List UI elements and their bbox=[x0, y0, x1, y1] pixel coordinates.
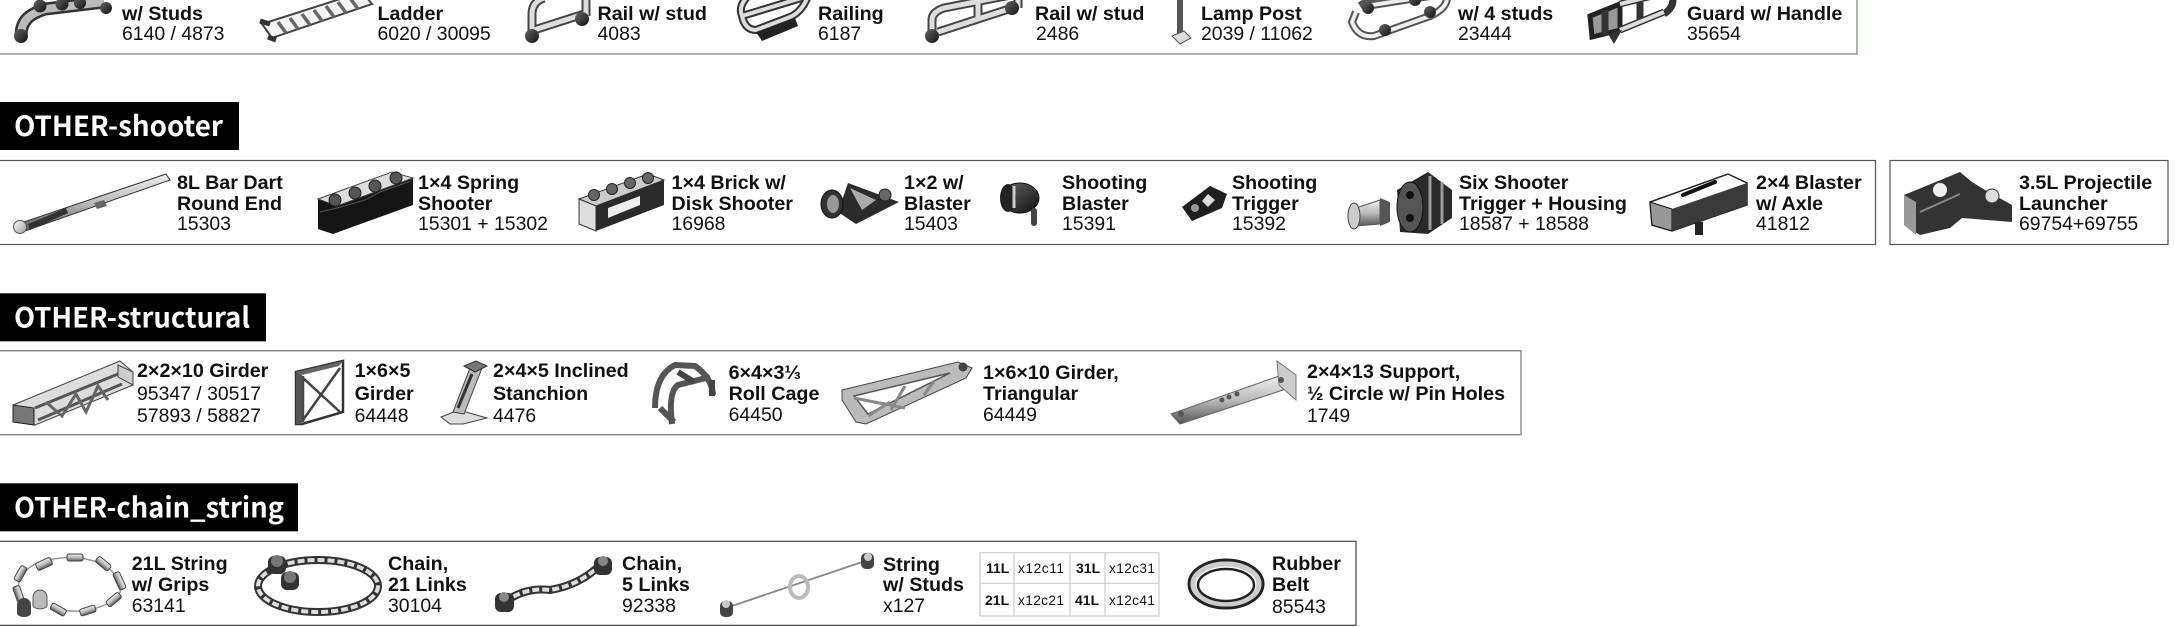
icon: girder bbox=[13, 361, 133, 425]
part: 2x2x10 girder bbox=[13, 360, 269, 427]
label: Railing bbox=[818, 3, 884, 25]
table: string lengths: x12c21 bbox=[1018, 593, 1064, 608]
label: w/ Axle bbox=[1755, 193, 1823, 215]
table: string lengths: x12c11 bbox=[1018, 561, 1064, 576]
label: ½ Circle w/ Pin Holes bbox=[1307, 383, 1505, 405]
icon: trigger bbox=[1182, 186, 1227, 221]
part: 1x6x5 girder bbox=[296, 360, 414, 427]
label: 2×4×13 Support, bbox=[1307, 361, 1460, 383]
part: 1x2 blaster bbox=[821, 172, 971, 235]
icon: guard bbox=[1590, 0, 1673, 44]
label: 30104 bbox=[388, 595, 442, 617]
icon: frame bbox=[1352, 0, 1447, 36]
icon: triangular girder bbox=[842, 362, 972, 424]
label: Chain, bbox=[388, 553, 448, 575]
icon: chain loop bbox=[258, 555, 378, 612]
panel: shooter parts bbox=[0, 160, 1876, 244]
label: 15403 bbox=[904, 213, 958, 235]
label: 64450 bbox=[729, 404, 783, 426]
part: spring shooter bbox=[318, 172, 548, 235]
part: bar dart bbox=[14, 172, 283, 235]
part: chain 5 links bbox=[495, 553, 690, 617]
label: Shooter bbox=[418, 193, 493, 215]
panel: projectile launcher bbox=[1890, 160, 2168, 244]
label: 69754+69755 bbox=[2019, 213, 2138, 235]
label: Trigger + Housing bbox=[1459, 193, 1627, 215]
label: w/ Studs bbox=[121, 3, 203, 25]
label: 1×4 Spring bbox=[418, 172, 519, 194]
label: 3.5L Projectile bbox=[2019, 172, 2152, 194]
icon: dart bbox=[14, 174, 170, 234]
icon: railing loop bbox=[741, 0, 808, 41]
label: Guard w/ Handle bbox=[1687, 3, 1842, 25]
icon: 1x2 blaster bbox=[821, 183, 899, 224]
label: Girder bbox=[355, 383, 414, 405]
icon: string with grips bbox=[12, 554, 126, 617]
label: 64448 bbox=[355, 405, 409, 427]
label: Rail w/ stud bbox=[1035, 3, 1144, 25]
part: support bbox=[1171, 361, 1505, 427]
label: Ladder bbox=[378, 3, 443, 25]
label: Disk Shooter bbox=[672, 193, 793, 215]
label: 85543 bbox=[1272, 596, 1326, 618]
heading: OTHER-shooter: OTHER-shooter bbox=[14, 105, 224, 145]
label: 18587 + 18588 bbox=[1459, 213, 1589, 235]
label: Lamp Post bbox=[1201, 3, 1302, 25]
label: Belt bbox=[1272, 574, 1310, 596]
label: Round End bbox=[177, 193, 282, 215]
label: 5 Links bbox=[622, 574, 690, 596]
part: ladder bbox=[260, 0, 491, 45]
heading: OTHER-structural: OTHER-structural bbox=[14, 296, 250, 336]
label: 6×4×3⅓ bbox=[729, 362, 801, 384]
icon: short chain bbox=[495, 556, 612, 612]
label: 95347 / 30517 bbox=[137, 383, 261, 405]
label: Blaster bbox=[1062, 193, 1129, 215]
icon: spring shooter brick bbox=[318, 172, 413, 234]
label: Launcher bbox=[2019, 193, 2108, 215]
label: 15303 bbox=[177, 213, 231, 235]
label: String bbox=[883, 554, 940, 576]
label: 2039 / 11062 bbox=[1201, 23, 1313, 45]
label: w/ 4 studs bbox=[1457, 3, 1553, 25]
part: bar frame with 4 studs bbox=[1352, 0, 1553, 45]
label: 1×6×10 Girder, bbox=[983, 362, 1119, 384]
table: string lengths: 21L bbox=[985, 592, 1010, 608]
icon: rubber belt bbox=[1189, 560, 1263, 608]
icon: lamp post bbox=[1172, 0, 1191, 44]
icon: string with studs bbox=[720, 553, 874, 617]
label: 4476 bbox=[493, 405, 536, 427]
part: inclined stanchion bbox=[441, 360, 629, 427]
label: x127 bbox=[883, 595, 925, 617]
table: string lengths: x12c31 bbox=[1109, 561, 1155, 576]
label: 21 Links bbox=[388, 574, 467, 596]
label: Trigger bbox=[1232, 193, 1299, 215]
label: 15301 + 15302 bbox=[418, 213, 548, 235]
label: Shooting bbox=[1232, 172, 1317, 194]
label: 2×4×5 Inclined bbox=[493, 360, 629, 382]
part: string with studs bbox=[720, 553, 964, 617]
label: Six Shooter bbox=[1459, 172, 1569, 194]
label: 41812 bbox=[1756, 213, 1810, 235]
table: string lengths: x12c41 bbox=[1109, 593, 1155, 608]
table: string lengths: 31L bbox=[1076, 560, 1101, 576]
label: 2×4 Blaster bbox=[1756, 172, 1862, 194]
icon: support beam bbox=[1171, 361, 1296, 424]
table: string lengths: 41L bbox=[1075, 592, 1100, 608]
label: Chain, bbox=[622, 553, 682, 575]
part: roll cage bbox=[655, 362, 819, 426]
label: Rubber bbox=[1272, 553, 1341, 575]
label: Rail w/ stud bbox=[598, 3, 707, 25]
label: 21L String bbox=[132, 553, 228, 575]
part: lamp post bbox=[1172, 0, 1313, 45]
part: pipe with studs bbox=[14, 0, 224, 45]
label: 35654 bbox=[1687, 23, 1741, 45]
label: 1×2 w/ bbox=[904, 172, 964, 194]
part: rail with stud bbox=[525, 0, 707, 45]
heading: OTHER-chain_string: OTHER-chain_string bbox=[14, 486, 284, 526]
part: rail with stud 2 bbox=[925, 0, 1144, 45]
part: guard with handle bbox=[1590, 0, 1842, 45]
label: 92338 bbox=[622, 595, 676, 617]
label: 6187 bbox=[818, 23, 861, 45]
part: rubber belt bbox=[1189, 553, 1341, 618]
icon: disk shooter brick bbox=[579, 172, 664, 231]
label: Stanchion bbox=[493, 383, 588, 405]
table: string lengths bbox=[980, 553, 1159, 616]
label: w/ Studs bbox=[882, 574, 964, 596]
label: 2486 bbox=[1036, 23, 1079, 45]
part: chain 21 links bbox=[258, 553, 467, 617]
label: 1749 bbox=[1307, 405, 1350, 427]
icon: projectile launcher bbox=[1904, 172, 2012, 235]
label: 15392 bbox=[1232, 213, 1286, 235]
label: 2×2×10 Girder bbox=[137, 360, 269, 382]
part: six shooter bbox=[1348, 172, 1627, 235]
icon: trigger and housing bbox=[1348, 172, 1452, 234]
part: railing bbox=[741, 0, 884, 45]
label: 63141 bbox=[132, 595, 186, 617]
icon: 2x4 blaster bbox=[1650, 174, 1747, 235]
part: triangular girder bbox=[842, 362, 1119, 426]
label: 6140 / 4873 bbox=[122, 23, 224, 45]
label: w/ Grips bbox=[131, 574, 209, 596]
icon: long rail bbox=[925, 0, 1019, 43]
part: 2x4 blaster bbox=[1650, 172, 1862, 235]
label: Shooting bbox=[1062, 172, 1147, 194]
table: string lengths: 11L bbox=[986, 560, 1010, 576]
icon: rail bbox=[525, 0, 589, 43]
icon: square girder bbox=[296, 361, 343, 424]
icon: stanchion bbox=[441, 361, 487, 424]
label: 57893 / 58827 bbox=[137, 405, 261, 427]
panel: top row parts bbox=[0, 0, 1857, 54]
label: 8L Bar Dart bbox=[177, 172, 283, 194]
label: Roll Cage bbox=[729, 383, 819, 405]
panel: structural parts bbox=[0, 351, 1521, 435]
label: 1×4 Brick w/ bbox=[672, 172, 786, 194]
label: 64449 bbox=[983, 404, 1037, 426]
icon: ladder bbox=[260, 0, 372, 40]
label: 15391 bbox=[1062, 213, 1116, 235]
label: 23444 bbox=[1458, 23, 1512, 45]
label: 6020 / 30095 bbox=[378, 23, 491, 45]
part: disk shooter brick bbox=[579, 172, 793, 235]
icon: roll cage bbox=[655, 365, 713, 424]
part: shooting trigger bbox=[1182, 172, 1317, 235]
icon: shooting blaster bbox=[1000, 183, 1039, 226]
label: 4083 bbox=[598, 23, 641, 45]
part: shooting blaster bbox=[1000, 172, 1147, 235]
label: Blaster bbox=[904, 193, 971, 215]
part: string with grips bbox=[12, 553, 228, 617]
icon: curved pipe bbox=[14, 0, 112, 43]
label: 1×6×5 bbox=[355, 360, 410, 382]
label: Triangular bbox=[983, 383, 1079, 405]
label: 16968 bbox=[672, 213, 725, 235]
panel: chain and string parts bbox=[0, 541, 1356, 625]
